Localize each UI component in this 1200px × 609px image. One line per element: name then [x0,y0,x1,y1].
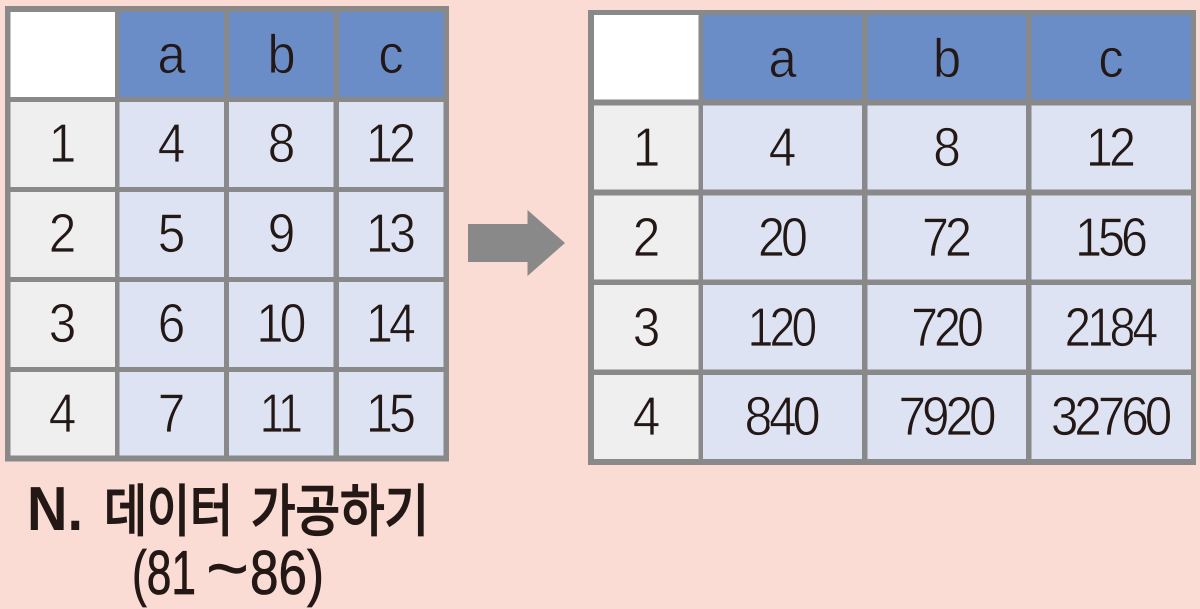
title word: processing: 가공하기 [251,480,429,543]
row headers: 1 [633,118,658,179]
result data cells: 32760 [1051,387,1171,448]
question range: (81 [132,539,196,608]
source data cells: 6 [158,294,183,355]
arrow [468,210,565,276]
result data cells: 72 [922,206,970,268]
source data cells: 10 [257,292,305,354]
column headers: b [268,24,294,85]
row headers: 4 [633,387,659,448]
source data cells: 15 [366,382,414,444]
question range: ~ [206,526,249,609]
result data cells: 720 [911,296,982,358]
empty corner cell [10,12,115,97]
column headers [703,15,1191,100]
row headers: 2 [633,208,658,269]
result data cells: 12 [1086,116,1134,178]
source data cells: 5 [158,204,183,265]
title prefix: N. [27,475,83,544]
column headers [120,12,444,97]
row headers: 3 [633,298,658,359]
row headers: 2 [49,204,74,265]
title word: data: 데이터 [104,480,233,543]
source data cells: 11 [260,382,301,444]
result data cells: 120 [748,296,816,358]
source data cells: 12 [366,112,414,174]
source data cells: 9 [268,204,293,265]
result data cells: 2184 [1065,297,1158,358]
source data cells: 8 [268,114,293,175]
source data cells: 14 [366,292,415,354]
result data cells: 7920 [899,387,995,448]
row headers [10,102,115,456]
source data cells [120,102,444,456]
panel: source table [5,6,449,462]
result data cells [703,106,1191,459]
column headers: c [378,24,403,85]
source data cells: 7 [158,384,183,445]
question range [132,526,324,609]
column headers: a [769,28,797,89]
row headers: 3 [49,294,74,355]
result data cells: 156 [1075,206,1146,268]
empty corner cell [594,15,698,100]
result data cells: 4 [769,118,795,179]
row headers: 4 [49,384,75,445]
column headers: b [933,28,960,89]
panel: result table [588,10,1196,465]
source data cells: 4 [158,114,184,175]
column headers: a [158,24,186,85]
caption: section title [27,475,429,609]
result data cells: 840 [745,386,819,447]
result data cells: 20 [758,206,806,268]
row headers: 1 [49,114,74,175]
column headers: c [1098,28,1123,89]
source data cells: 13 [366,202,414,264]
result data cells: 8 [933,118,959,179]
row headers [594,106,698,459]
question range: 86) [250,539,324,608]
